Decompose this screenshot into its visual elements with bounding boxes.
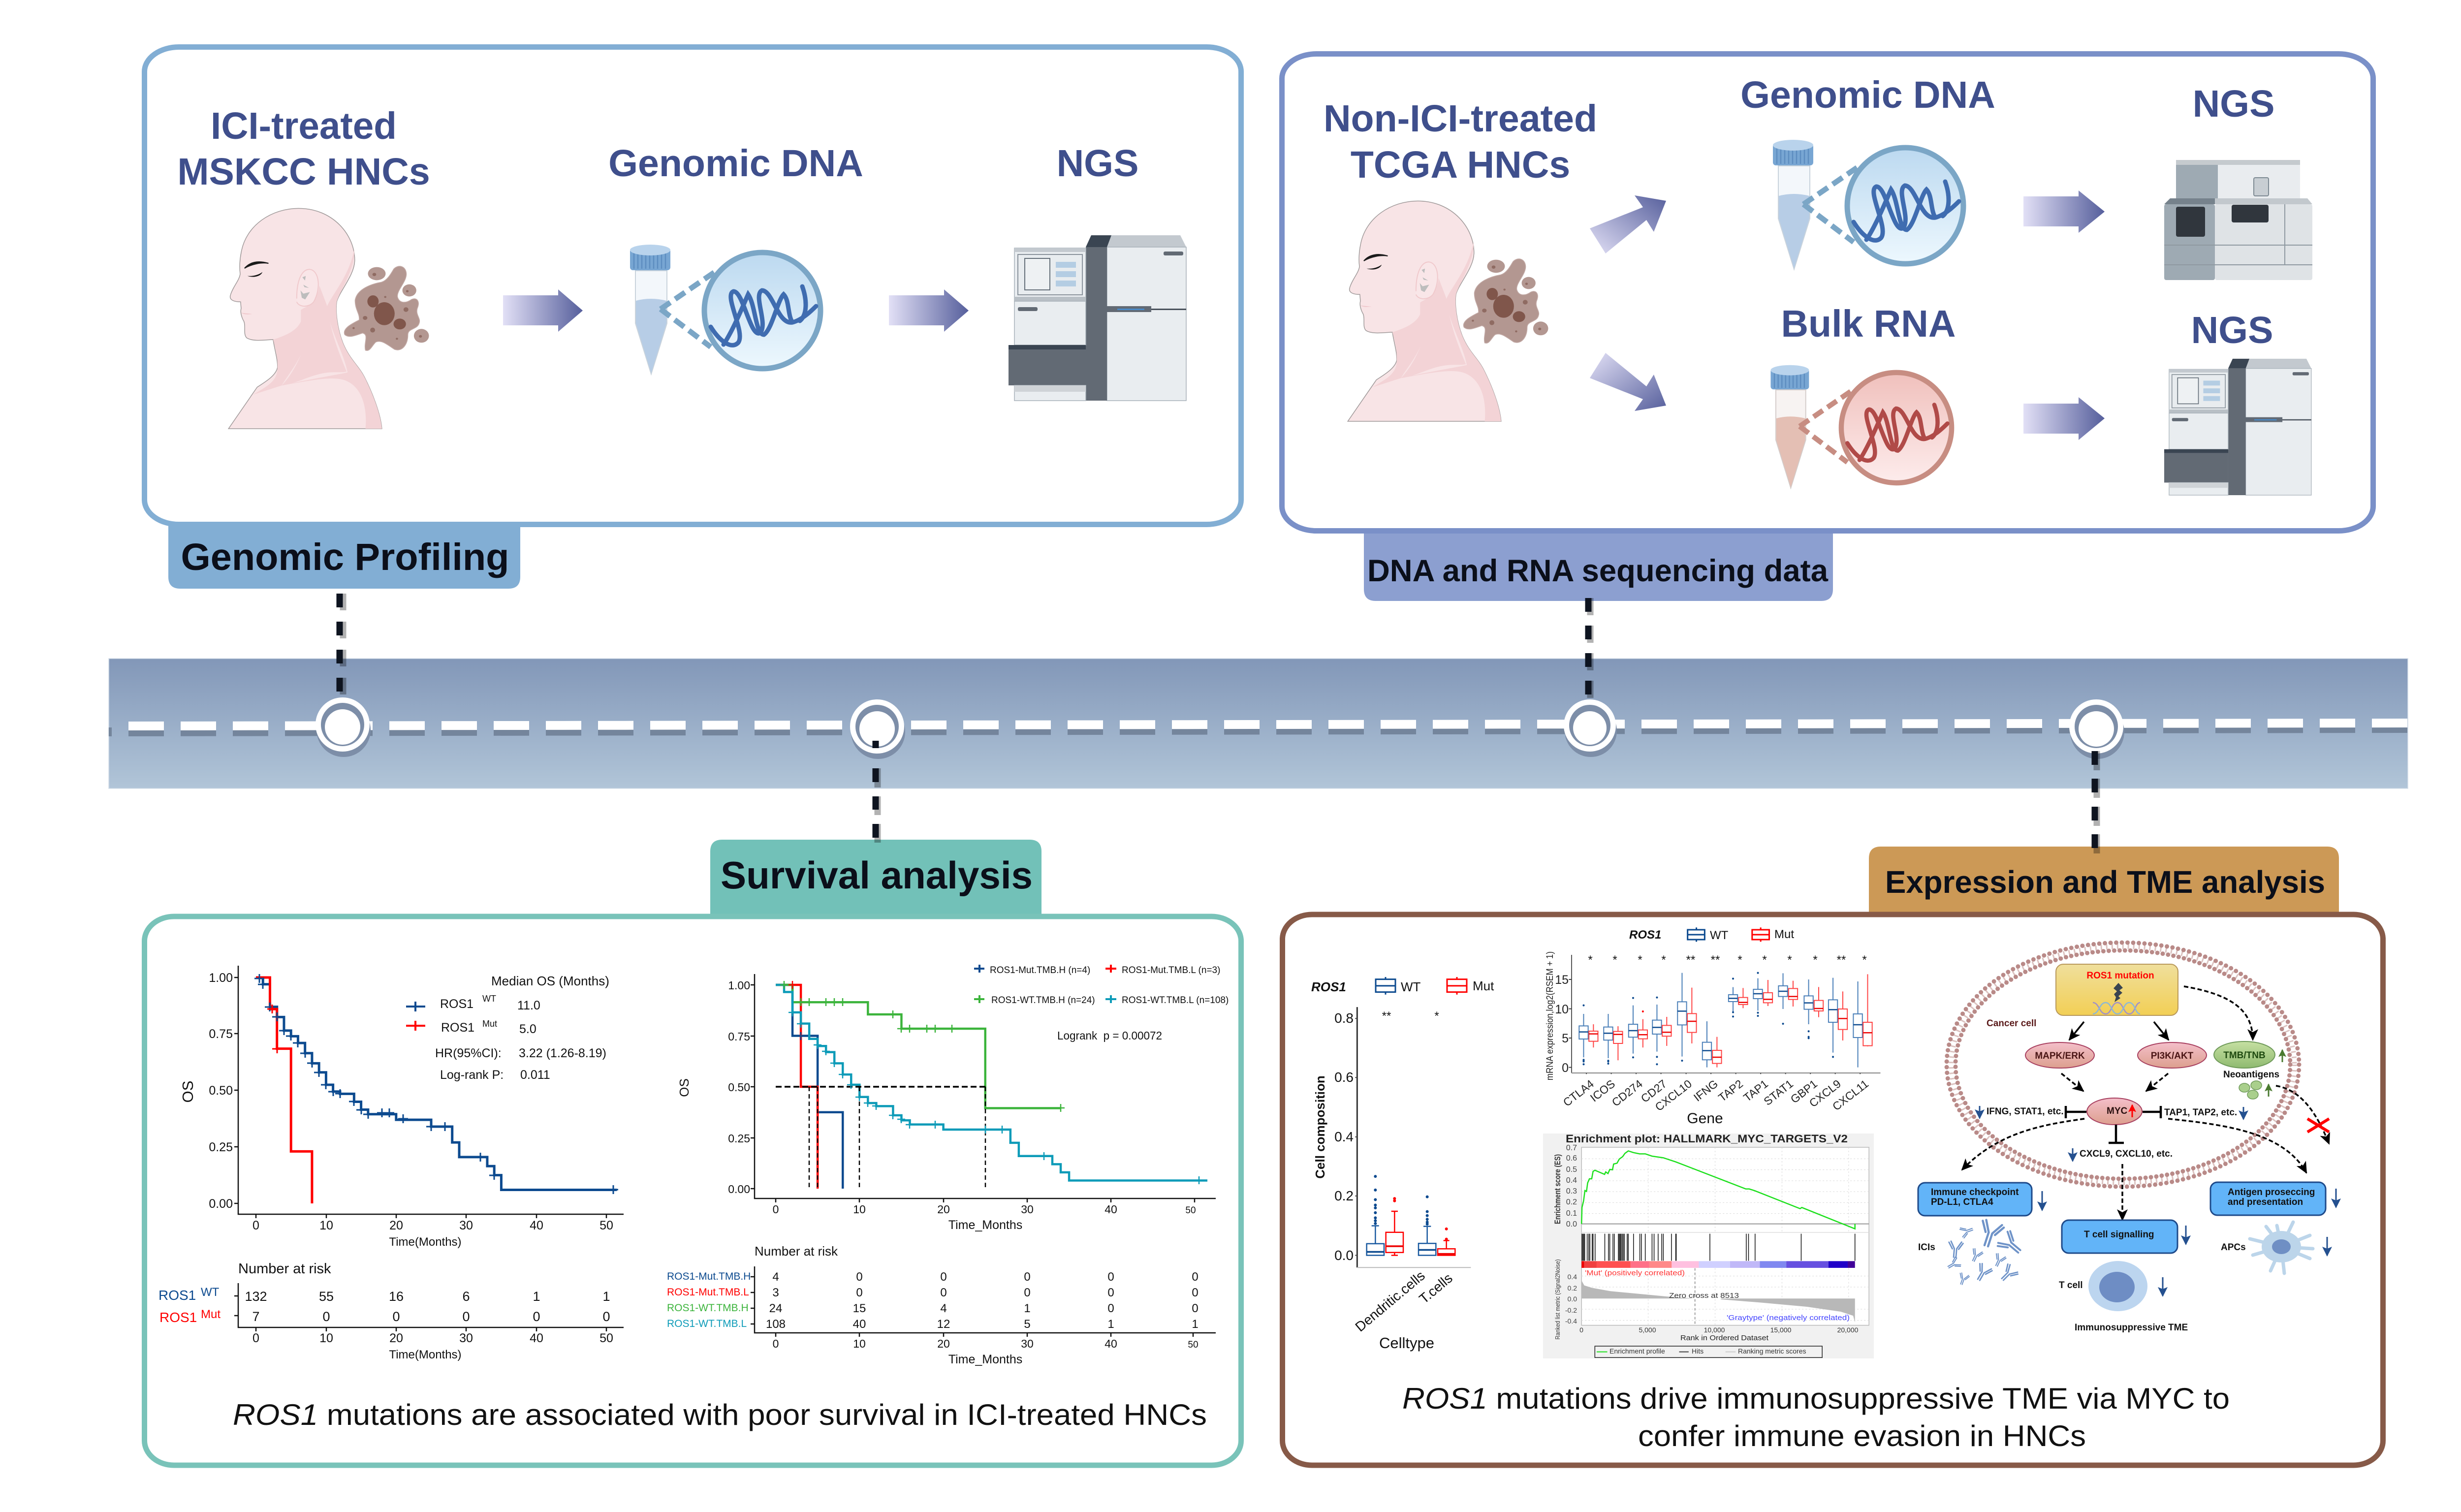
chart: Kaplan-Meier ROS1 and TMB groups: Time_Months xyxy=(948,1218,1022,1232)
connector dashes: sequencing data xyxy=(1588,598,1590,698)
table: number at risk, four groups: 0 xyxy=(940,1286,947,1299)
chart: Kaplan-Meier ROS1 WT vs Mut: 50 xyxy=(599,1219,613,1232)
connector dashes: expression analysis xyxy=(2095,751,2097,853)
table: number at risk, four groups: 10 xyxy=(853,1337,866,1350)
chart: gene expression box plot: IFNG xyxy=(1691,1077,1720,1104)
table: number at risk, ROS1 WT vs Mut: 1 xyxy=(533,1289,540,1304)
caption: expression and TME xyxy=(1402,1382,2230,1452)
table: number at risk, four groups: 0 xyxy=(1107,1302,1114,1315)
icon: APC xyxy=(2221,1222,2327,1273)
chart: Kaplan-Meier ROS1 WT vs Mut: 0.75 xyxy=(209,1027,233,1041)
legend: median OS: 0.011 xyxy=(520,1068,550,1082)
node: TMB/TNB: TMB/TNB xyxy=(2223,1050,2266,1061)
timeline node 4 xyxy=(2069,699,2124,759)
chart: cell composition box plot: * xyxy=(1434,1009,1439,1023)
icon: sequencer top xyxy=(2164,160,2312,280)
table: number at risk, four groups: 0 xyxy=(856,1286,863,1299)
chart: gene expression box plot: * xyxy=(1612,953,1617,967)
heading: NGS top: NGS xyxy=(2193,83,2274,125)
caption: expression and TME: confer immune evasion in HNCs xyxy=(1638,1419,2086,1452)
chart: GSEA enrichment plot: Rank in Ordered Dataset xyxy=(1680,1334,1769,1342)
chart: gene expression box plot: GBP1 xyxy=(1788,1077,1820,1106)
chart: GSEA enrichment plot: 0.1 xyxy=(1566,1209,1577,1218)
chart: cell composition box plot: 0.6 xyxy=(1334,1070,1354,1085)
node: PI3K/AKT xyxy=(2138,1042,2207,1068)
chart: GSEA enrichment plot: 15,000 xyxy=(1770,1326,1792,1334)
table: number at risk, four groups: ROS1-WT.TMB.L xyxy=(667,1318,747,1329)
section tab: DNA and RNA sequencing data xyxy=(1364,532,1833,601)
chart: GSEA enrichment plot: 20,000 xyxy=(1837,1326,1859,1334)
red cross xyxy=(2307,1119,2329,1132)
chart: Kaplan-Meier ROS1 WT vs Mut: Time(Months) xyxy=(389,1235,462,1249)
table: number at risk, four groups: 4 xyxy=(772,1270,779,1284)
chart: GSEA enrichment plot: Hits xyxy=(1692,1347,1704,1355)
table: number at risk, ROS1 WT vs Mut: 10 xyxy=(319,1331,333,1345)
icon: T cell xyxy=(2059,1261,2163,1311)
node: MAPK/ERK xyxy=(2025,1042,2094,1068)
chart: GSEA enrichment plot: 'Graytype' (negatively correlated) xyxy=(1727,1314,1850,1322)
chart: gene expression box plot: ICOS xyxy=(1588,1077,1617,1104)
heading: NGS: NGS xyxy=(1057,142,1138,185)
chart: cell composition box plot: ** xyxy=(1382,1009,1391,1023)
label: TAP1, TAP2: TAP1, TAP2, etc. xyxy=(2164,1107,2237,1118)
table: number at risk, ROS1 WT vs Mut: 0 xyxy=(322,1309,330,1324)
chart: Kaplan-Meier ROS1 and TMB groups: 20 xyxy=(937,1203,950,1216)
chart: GSEA enrichment plot: 0.4 xyxy=(1568,1273,1577,1281)
caption: survival: ROS1 mutations are associated with poor survival in ICI-treated HNCs xyxy=(233,1398,1207,1431)
chart: gene expression box plot: * xyxy=(1588,953,1593,967)
table: number at risk, ROS1 WT vs Mut: 0 xyxy=(252,1331,259,1345)
section tab: Genomic Profiling xyxy=(168,525,520,589)
chart: GSEA enrichment plot: 10,000 xyxy=(1704,1326,1725,1334)
box: immune checkpoint: PD-L1, CTLA4 xyxy=(1931,1197,1993,1207)
neoantigens xyxy=(2223,1070,2279,1099)
table: number at risk, ROS1 WT vs Mut: 30 xyxy=(459,1331,473,1345)
chart: GSEA enrichment plot: 0.4 xyxy=(1566,1176,1577,1185)
chart: cell composition box plot: Dendritic.cells xyxy=(1352,1268,1428,1335)
chart: GSEA enrichment plot: 0.7 xyxy=(1566,1144,1577,1152)
icon: sequencing machine xyxy=(1009,235,1186,401)
chart: cell composition box plot: 0.2 xyxy=(1334,1188,1354,1203)
icon: T cell: T cell xyxy=(2059,1280,2083,1291)
chart: cell composition box plot: 0.0 xyxy=(1334,1248,1354,1263)
label: immunosuppressive TME: Immunosuppressive TME xyxy=(2075,1323,2188,1333)
table: number at risk, four groups: 0 xyxy=(1024,1270,1031,1284)
chart: gene expression box plot: 10 xyxy=(1555,1003,1569,1016)
chart: gene expression box plot: * xyxy=(1787,953,1792,967)
table: number at risk, ROS1 WT vs Mut: ROS1 xyxy=(158,1288,196,1303)
chart: GSEA enrichment plot: -0.4 xyxy=(1565,1317,1577,1325)
chart: gene expression box plot: 0 xyxy=(1562,1061,1569,1075)
chart: Kaplan-Meier ROS1 and TMB groups: 0.00 xyxy=(728,1183,750,1196)
chart: Kaplan-Meier ROS1 WT vs Mut: OS xyxy=(179,1081,196,1102)
chart: GSEA enrichment plot: 0.2 xyxy=(1568,1284,1577,1292)
chart: gene expression box plot: * xyxy=(1737,953,1742,967)
table: number at risk, ROS1 WT vs Mut: 20 xyxy=(389,1331,403,1345)
node: MYC: MYC xyxy=(2107,1106,2127,1116)
panel: genomic profiling of ICI-treated cohort xyxy=(145,47,1241,525)
chart: gene expression box plot: ** xyxy=(1711,953,1720,967)
table: number at risk, four groups: 0 xyxy=(1192,1270,1199,1284)
inhibition bars from MYC xyxy=(2066,1106,2161,1143)
chart: gene expression box plot: 15 xyxy=(1555,973,1569,987)
chart: gene expression box plot: TAP2 xyxy=(1716,1077,1745,1104)
table: number at risk, four groups: 24 xyxy=(769,1302,782,1315)
node: MAPK/ERK: MAPK/ERK xyxy=(2035,1051,2085,1061)
icon: ICI antibodies: ICIs xyxy=(1918,1242,1935,1253)
label: CXCL9, CXCL10: CXCL9, CXCL10, etc. xyxy=(2080,1149,2173,1159)
heading: Non-ICI-treated TCGA HNCs: Non-ICI-treated xyxy=(1324,97,1597,140)
chart: Kaplan-Meier ROS1 and TMB groups: 50 xyxy=(1185,1205,1196,1216)
table: number at risk, four groups: 3 xyxy=(772,1286,779,1299)
table: number at risk, four groups: 5 xyxy=(1024,1318,1031,1331)
chart: Kaplan-Meier ROS1 WT vs Mut: 0.25 xyxy=(209,1140,233,1154)
table: number at risk, ROS1 WT vs Mut: 132 xyxy=(245,1289,267,1304)
chart: gene expression box plot: * xyxy=(1862,953,1867,967)
chart: gene expression box plot xyxy=(1545,927,1881,1127)
table: number at risk, ROS1 WT vs Mut: 0 xyxy=(462,1309,470,1324)
ROS1 mutation box xyxy=(2056,964,2178,1015)
box: T cell signalling: T cell signalling xyxy=(2084,1229,2154,1240)
table: number at risk, ROS1 WT vs Mut: WT xyxy=(201,1286,220,1299)
node: TMB/TNB xyxy=(2214,1041,2282,1068)
chart: cell composition box plot: Celltype xyxy=(1379,1334,1434,1352)
table: number at risk, four groups: 40 xyxy=(853,1318,866,1331)
panel: DNA and RNA sequencing of non-ICI cohort xyxy=(1282,54,2373,531)
section tab: Expression and TME analysis: Expression and TME analysis xyxy=(1885,864,2325,900)
chart: GSEA enrichment plot: 5,000 xyxy=(1639,1326,1656,1334)
icon: patient with tumour xyxy=(1348,201,1548,421)
section tab: DNA and RNA sequencing data: DNA and RNA sequencing data xyxy=(1367,554,1829,588)
connector dashes: survival analysis xyxy=(876,741,878,843)
chart: GSEA enrichment plot: 0.2 xyxy=(1566,1198,1577,1206)
table: number at risk, four groups: 15 xyxy=(853,1302,866,1315)
heading: NGS bottom: NGS xyxy=(2191,309,2273,351)
icon: tube with RNA xyxy=(1770,365,1952,488)
section tab: Survival analysis: Survival analysis xyxy=(721,853,1033,897)
timeline band xyxy=(109,659,2416,788)
table: number at risk, four groups: 40 xyxy=(1104,1337,1117,1350)
legend: median OS xyxy=(406,974,609,1082)
table: number at risk, four groups: 0 xyxy=(856,1270,863,1284)
chart: Kaplan-Meier ROS1 WT vs Mut: 0 xyxy=(252,1219,259,1232)
table: number at risk, four groups: 108 xyxy=(766,1318,786,1331)
chart: cell composition box plot: T.cells xyxy=(1416,1270,1455,1307)
chart: gene expression box plot: Gene xyxy=(1687,1110,1723,1127)
chart: GSEA enrichment plot xyxy=(1543,1133,1874,1358)
chart: gene expression box plot: CXCL10 xyxy=(1653,1077,1694,1113)
table: number at risk, ROS1 WT vs Mut: 6 xyxy=(462,1289,470,1304)
heading: Genomic DNA: Genomic DNA xyxy=(1740,74,1995,116)
table: number at risk, ROS1 WT vs Mut: 50 xyxy=(599,1331,613,1345)
table: number at risk, four groups: 50 xyxy=(1188,1340,1199,1350)
chart: gene expression box plot: * xyxy=(1813,953,1818,967)
arrow: DNA to NGS xyxy=(2023,190,2105,233)
table: number at risk, four groups: 0 xyxy=(940,1270,947,1284)
legend: median OS: Mut xyxy=(482,1019,497,1029)
chart: Kaplan-Meier ROS1 and TMB groups: 30 xyxy=(1021,1203,1034,1216)
chart: Kaplan-Meier ROS1 and TMB groups: 0 xyxy=(773,1203,779,1216)
table: number at risk, ROS1 WT vs Mut: Number at risk xyxy=(238,1261,331,1277)
chart: gene expression box plot: ** xyxy=(1686,953,1695,967)
chart: GSEA enrichment plot: -0.2 xyxy=(1565,1306,1577,1314)
panel: survival analysis xyxy=(145,916,1241,1465)
table: number at risk, ROS1 WT vs Mut: Mut xyxy=(201,1308,221,1321)
chart: gene expression box plot: Mut xyxy=(1774,928,1794,941)
icon: sequencer bottom xyxy=(2164,359,2311,495)
icon: tube with DNA xyxy=(630,245,820,374)
icon: APC: APCs xyxy=(2221,1242,2246,1253)
chart: gene expression box plot: CTLA4 xyxy=(1561,1077,1596,1109)
table: number at risk, four groups: 1 xyxy=(1107,1318,1114,1331)
table: number at risk, ROS1 WT vs Mut: 0 xyxy=(533,1309,540,1324)
chart: Kaplan-Meier ROS1 and TMB groups: 40 xyxy=(1104,1203,1117,1216)
chart: gene expression box plot: 5 xyxy=(1562,1032,1569,1045)
arrow: to genomic DNA xyxy=(503,289,583,332)
legend: median OS: WT xyxy=(482,994,496,1004)
legend: four groups: ROS1-WT.TMB.L (n=108) xyxy=(1122,995,1229,1006)
dashed arrows xyxy=(1962,986,2329,1220)
arrow: RNA to NGS xyxy=(2023,397,2105,440)
section tab: Survival analysis xyxy=(710,840,1041,925)
chart: cell composition box plot: Cell composition xyxy=(1313,1075,1327,1179)
chart: gene expression box plot: * xyxy=(1661,953,1666,967)
chart: gene expression box plot: * xyxy=(1762,953,1767,967)
chart: cell composition box plot: Mut xyxy=(1473,978,1494,993)
chart: gene expression box plot: WT xyxy=(1710,929,1729,942)
solid arrows from mutation xyxy=(2069,1022,2169,1040)
node: PI3K/AKT: PI3K/AKT xyxy=(2151,1051,2194,1061)
icon: patient with tumour xyxy=(228,208,429,429)
chart: Kaplan-Meier ROS1 and TMB groups: 10 xyxy=(853,1203,866,1216)
chart: gene expression box plot: CD27 xyxy=(1639,1077,1669,1105)
table: number at risk, four groups: ROS1-Mut.TMB.L xyxy=(667,1287,749,1298)
table: number at risk, ROS1 WT vs Mut: 40 xyxy=(530,1331,543,1345)
table: number at risk, four groups: ROS1-Mut.TMB.H xyxy=(667,1271,751,1282)
chart: GSEA enrichment plot: 0.3 xyxy=(1566,1187,1577,1196)
chart: Kaplan-Meier ROS1 WT vs Mut: 30 xyxy=(459,1219,473,1232)
label: IFNG, STAT1: IFNG, STAT1, etc. xyxy=(1987,1106,2064,1117)
box: antigen processing xyxy=(2210,1182,2336,1215)
section tab: Genomic Profiling: Genomic Profiling xyxy=(181,536,509,578)
cell membrane xyxy=(1947,943,2299,1187)
chart: cell composition box plot: 0.8 xyxy=(1334,1010,1354,1026)
legend: median OS: Median OS (Months) xyxy=(491,974,609,988)
chart: Kaplan-Meier ROS1 WT vs Mut xyxy=(179,966,624,1249)
chart: GSEA enrichment plot: Zero cross at 8513 xyxy=(1669,1292,1739,1300)
legend: median OS: ROS1 xyxy=(441,1021,474,1035)
timeline node 1 xyxy=(316,697,371,757)
chart: gene expression box plot: TAP1 xyxy=(1741,1077,1770,1104)
legend: median OS: 3.22 (1.26-8.19) xyxy=(519,1046,606,1060)
table: number at risk, four groups: Number at risk xyxy=(755,1244,838,1259)
table: number at risk, four groups xyxy=(667,1244,1216,1366)
table: number at risk, ROS1 WT vs Mut: 7 xyxy=(252,1309,260,1324)
table: number at risk, ROS1 WT vs Mut xyxy=(158,1261,624,1361)
table: number at risk, four groups: 30 xyxy=(1021,1337,1034,1350)
legend: median OS: HR(95%CI): xyxy=(435,1046,502,1060)
table: number at risk, four groups: 12 xyxy=(937,1318,950,1331)
table: number at risk, four groups: ROS1-WT.TMB.H xyxy=(667,1302,749,1314)
chart: gene expression box plot: * xyxy=(1638,953,1642,967)
legend: median OS: 11.0 xyxy=(517,999,540,1012)
table: number at risk, four groups: 1 xyxy=(1024,1302,1031,1315)
p value: Logrank p = 0.00072 xyxy=(1057,1029,1162,1042)
heading: Bulk RNA: Bulk RNA xyxy=(1781,303,1956,345)
table: number at risk, ROS1 WT vs Mut: 0 xyxy=(602,1309,610,1324)
panel: expression and TME analysis xyxy=(1283,914,2383,1465)
chart: GSEA enrichment plot: Enrichment score (ES) xyxy=(1553,1154,1562,1224)
chart: GSEA enrichment plot: 0.0 xyxy=(1568,1295,1577,1303)
chart: GSEA enrichment plot: Ranking metric scores xyxy=(1738,1347,1806,1355)
chart: Kaplan-Meier ROS1 WT vs Mut: 10 xyxy=(319,1219,333,1232)
chart: GSEA enrichment plot: 'Mut' (positively correlated) xyxy=(1585,1269,1685,1277)
legend: median OS: Log-rank P: xyxy=(440,1068,504,1082)
icon: ICI antibodies xyxy=(1918,1219,2025,1286)
table: number at risk, ROS1 WT vs Mut: Time(Months) xyxy=(389,1348,462,1361)
legend: median OS: 5.0 xyxy=(519,1022,536,1036)
legend: four groups: ROS1-Mut.TMB.H (n=4) xyxy=(990,965,1090,976)
section tab: Expression and TME analysis xyxy=(1869,847,2339,925)
chart: GSEA enrichment plot: 0.0 xyxy=(1566,1220,1577,1228)
table: number at risk, ROS1 WT vs Mut: 1 xyxy=(602,1289,610,1304)
chart: GSEA enrichment plot: 0 xyxy=(1579,1326,1583,1334)
chart: Kaplan-Meier ROS1 WT vs Mut: 1.00 xyxy=(209,971,233,985)
chart: GSEA enrichment plot: 0.5 xyxy=(1566,1166,1577,1174)
chart: Kaplan-Meier ROS1 WT vs Mut: 0.00 xyxy=(209,1197,233,1211)
table: number at risk, four groups: 0 xyxy=(1107,1270,1114,1284)
table: number at risk, four groups: 0 xyxy=(773,1337,779,1350)
GSEA colour bar xyxy=(1581,1261,1855,1268)
arrow: down to RNA xyxy=(1590,353,1666,411)
table: number at risk, four groups: Time_Months xyxy=(948,1353,1022,1366)
table: number at risk, four groups: 20 xyxy=(937,1337,950,1350)
chart: cell composition box plot: WT xyxy=(1401,979,1421,994)
table: number at risk, ROS1 WT vs Mut: 55 xyxy=(319,1289,334,1304)
box: antigen processing: Antigen proseccing xyxy=(2228,1187,2315,1197)
chart: cell composition box plot: 0.4 xyxy=(1334,1129,1354,1144)
heading: ICI-treated MSKCC HNCs: ICI-treated xyxy=(211,105,397,147)
legend: four groups xyxy=(974,965,1229,1006)
label: cancer cell: Cancer cell xyxy=(1987,1018,2036,1029)
chart: Kaplan-Meier ROS1 WT vs Mut: 40 xyxy=(530,1219,543,1232)
caption: expression and TME: ROS1 mutations drive immunosuppressive TME via MYC to xyxy=(1402,1382,2230,1415)
table: number at risk, four groups: 4 xyxy=(940,1302,947,1315)
chart: gene expression box plot: mRNA expression,log2(RSEM + 1) xyxy=(1545,951,1555,1080)
legend: four groups: ROS1-WT.TMB.H (n=24) xyxy=(991,995,1095,1006)
chart: Kaplan-Meier ROS1 WT vs Mut: 20 xyxy=(389,1219,403,1232)
table: number at risk, four groups: 0 xyxy=(1192,1302,1199,1315)
heading: ICI-treated MSKCC HNCs: MSKCC HNCs xyxy=(177,151,430,193)
box: immune checkpoint: Immune checkpoint xyxy=(1931,1187,2019,1197)
chart: Kaplan-Meier ROS1 and TMB groups: 0.25 xyxy=(728,1132,750,1145)
chart: Kaplan-Meier ROS1 and TMB groups: 0.75 xyxy=(728,1030,750,1043)
chart: Kaplan-Meier ROS1 and TMB groups: 0.50 xyxy=(728,1081,750,1094)
arrow: to NGS xyxy=(889,289,969,332)
arrow: up to DNA xyxy=(1590,195,1666,253)
chart: GSEA enrichment plot: Enrichment plot: HALLMARK_MYC_TARGETS_V2 xyxy=(1566,1133,1848,1145)
table: number at risk, four groups: 1 xyxy=(1192,1318,1199,1331)
chart: Kaplan-Meier ROS1 and TMB groups: 1.00 xyxy=(728,979,750,992)
chart: gene expression box plot: CXCL9 xyxy=(1807,1077,1843,1110)
chart: gene expression box plot: ** xyxy=(1837,953,1846,967)
table: number at risk, ROS1 WT vs Mut: 16 xyxy=(389,1289,404,1304)
chart: gene expression box plot: STAT1 xyxy=(1761,1077,1796,1108)
chart: cell composition box plot: ROS1 xyxy=(1311,979,1346,994)
chart: GSEA enrichment plot: Enrichment profile xyxy=(1609,1347,1665,1355)
chart: GSEA enrichment plot: 0.6 xyxy=(1566,1154,1577,1163)
chart: Kaplan-Meier ROS1 and TMB groups xyxy=(677,965,1229,1232)
chart: Kaplan-Meier ROS1 WT vs Mut: 0.50 xyxy=(209,1084,233,1098)
table: number at risk, four groups: 0 xyxy=(1107,1286,1114,1299)
table: number at risk, four groups: 0 xyxy=(1024,1286,1031,1299)
table: number at risk, ROS1 WT vs Mut: 0 xyxy=(392,1309,400,1324)
heading: Non-ICI-treated TCGA HNCs: TCGA HNCs xyxy=(1351,144,1570,186)
node: MYC xyxy=(2087,1098,2142,1125)
timeline node 2 xyxy=(850,699,905,759)
neoantigens: Neoantigens xyxy=(2223,1070,2279,1080)
chart: gene expression box plot: CXCL11 xyxy=(1830,1077,1871,1113)
legend: median OS: ROS1 xyxy=(440,997,473,1011)
heading: Genomic DNA: Genomic DNA xyxy=(608,142,863,185)
legend: four groups: ROS1-Mut.TMB.L (n=3) xyxy=(1122,965,1220,976)
chart: gene expression box plot: ROS1 xyxy=(1629,928,1661,942)
chart: Kaplan-Meier ROS1 and TMB groups: OS xyxy=(677,1078,692,1097)
chart: cell composition box plot xyxy=(1311,977,1494,1352)
box: T cell signalling xyxy=(2062,1220,2186,1253)
diagram: ROS1 mutation mechanism in cancer cell xyxy=(1918,943,2336,1333)
icon: tube with DNA xyxy=(1773,140,1963,269)
chart: GSEA enrichment plot: Ranked list metric (Signal2Noise) xyxy=(1554,1259,1561,1340)
timeline node 3 xyxy=(1564,699,1617,757)
table: number at risk, ROS1 WT vs Mut: ROS1 xyxy=(159,1310,197,1325)
ROS1 mutation box: ROS1 mutation xyxy=(2086,971,2154,981)
box: antigen processing: and presentation xyxy=(2228,1197,2303,1207)
table: number at risk, four groups: 0 xyxy=(1192,1286,1199,1299)
box: immune checkpoint xyxy=(1918,1183,2042,1216)
connector dashes: genomic profiling xyxy=(340,594,343,694)
chart: gene expression box plot: CD274 xyxy=(1609,1077,1645,1109)
